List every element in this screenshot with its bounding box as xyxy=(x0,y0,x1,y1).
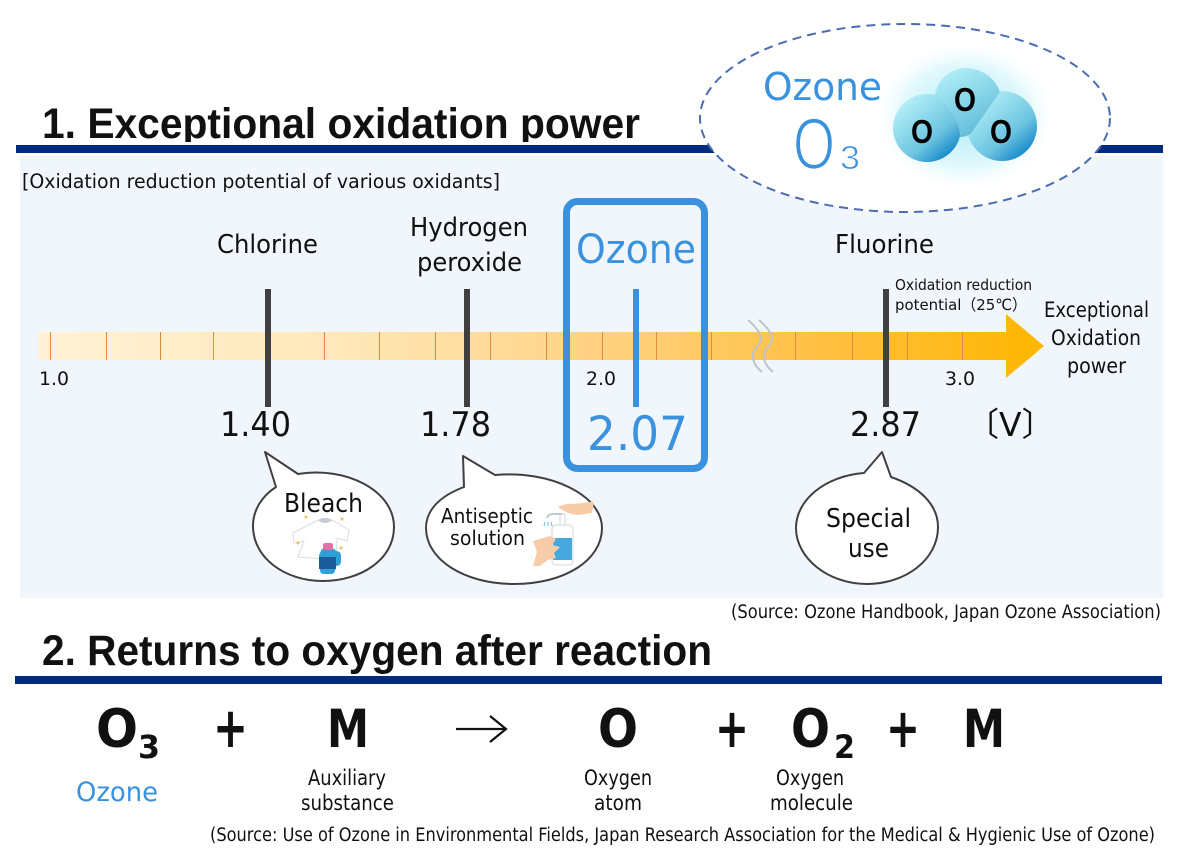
term: oxygen atom: Oxygen xyxy=(584,766,652,790)
callout: antiseptic solution: Antiseptic xyxy=(441,504,533,528)
term: oxygen atom: O xyxy=(598,699,638,760)
marker: ozone highlight xyxy=(566,202,704,468)
heading: section 2: 2. Returns to oxygen after reaction xyxy=(42,627,712,675)
callout: bleach xyxy=(253,452,394,581)
marker: hydrogen peroxide xyxy=(410,213,528,445)
term: ozone: Ozone xyxy=(76,777,158,808)
marker: hydrogen peroxide: 1.78 xyxy=(420,405,491,445)
icon: ozone molecule xyxy=(877,44,1053,188)
section 1 rule xyxy=(16,145,1163,153)
axis note: potential（25℃） xyxy=(895,296,1027,314)
panel subtitle: [Oxidation reduction potential of various oxidants] xyxy=(22,170,500,193)
arrow label: power xyxy=(1067,354,1126,378)
callout: special use: Special xyxy=(826,504,911,534)
marker: fluorine xyxy=(835,230,934,445)
callout: bleach: Bleach xyxy=(284,489,363,519)
axis note: Oxidation reduction xyxy=(895,276,1032,294)
plus: + xyxy=(715,697,749,760)
marker: ozone highlight: 2.07 xyxy=(587,407,688,462)
callout: antiseptic solution: solution xyxy=(450,526,525,550)
marker: hydrogen peroxide: Hydrogen xyxy=(410,213,528,243)
callout: antiseptic solution xyxy=(426,456,602,584)
plus: + xyxy=(886,697,920,760)
scale labels: 2.0 xyxy=(586,368,616,390)
icon: sanitiser pump and hands xyxy=(533,502,594,566)
marker: hydrogen peroxide: peroxide xyxy=(417,248,522,278)
term: oxygen atom xyxy=(584,699,652,815)
icon: ozone molecule: O xyxy=(990,113,1012,150)
scale labels xyxy=(39,368,975,390)
term: oxygen molecule: molecule xyxy=(770,791,853,815)
term: M: M xyxy=(963,699,1005,760)
callout: special use: use xyxy=(848,534,889,564)
term: oxygen molecule: 2 xyxy=(834,728,855,766)
section 2 rule xyxy=(15,676,1162,684)
axis note xyxy=(895,276,1032,314)
O3 formula: O xyxy=(793,105,835,185)
scale labels: 1.0 xyxy=(39,368,69,390)
plus: + xyxy=(213,696,248,761)
term: auxiliary substance: Auxiliary xyxy=(308,766,386,790)
arrow label xyxy=(1044,298,1149,378)
marker: fluorine: 2.87 xyxy=(850,405,921,445)
term: oxygen molecule: Oxygen xyxy=(776,766,844,790)
icon: ozone molecule: O xyxy=(911,113,933,150)
term: auxiliary substance xyxy=(301,699,394,815)
O3 formula: 3 xyxy=(840,139,860,176)
term: ozone: O xyxy=(96,699,138,760)
arrow label: Oxidation xyxy=(1051,326,1141,350)
arrow: oxidation scale with ticks xyxy=(38,314,1044,378)
scale labels: 3.0 xyxy=(945,368,975,390)
icon: ozone molecule: O xyxy=(954,81,976,118)
marker: chlorine xyxy=(217,230,318,445)
term: oxygen atom: atom xyxy=(594,791,642,815)
arrow label: Exceptional xyxy=(1044,298,1149,322)
equation xyxy=(76,696,1005,815)
heading: section 1: 1. Exceptional oxidation power xyxy=(42,100,640,148)
term: oxygen molecule xyxy=(770,699,855,815)
ozone label: Ozone xyxy=(763,65,882,109)
term: oxygen molecule: O xyxy=(791,699,830,760)
callout: ozone molecule ellipse xyxy=(700,24,1110,212)
marker: chlorine: 1.40 xyxy=(220,405,291,445)
term: auxiliary substance: substance xyxy=(301,791,394,815)
marker: fluorine: Fluorine xyxy=(835,230,934,260)
marker: ozone highlight: Ozone xyxy=(576,227,696,273)
marker: chlorine: Chlorine xyxy=(217,230,318,260)
arrow: reaction xyxy=(456,716,506,742)
icon: shirt and detergent bottle xyxy=(293,516,349,574)
term: auxiliary substance: M xyxy=(327,699,369,760)
callout: special use xyxy=(796,452,938,584)
unit: 〔V〕 xyxy=(966,405,1055,444)
term: ozone: 3 xyxy=(138,728,160,766)
term: ozone xyxy=(76,699,160,808)
panel: oxidation scale background xyxy=(20,156,1163,598)
